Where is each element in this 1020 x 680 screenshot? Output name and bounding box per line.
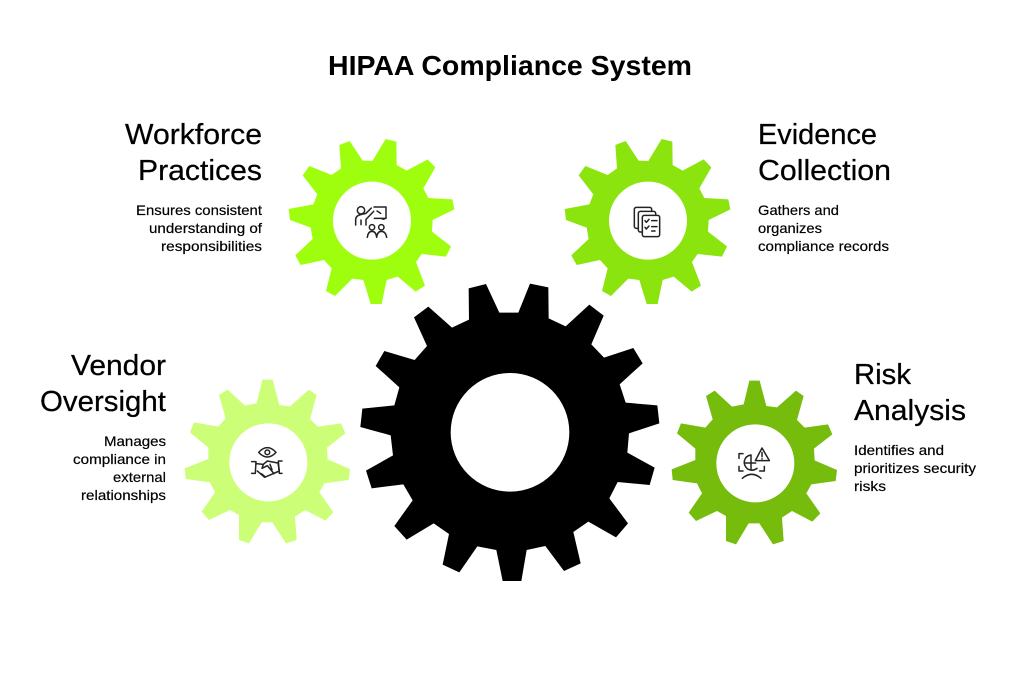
panel: vendor oversight: [40, 350, 350, 543]
title: HIPAA Compliance System: [328, 50, 692, 81]
text: risk description: Identifies and: [854, 442, 944, 458]
gear: workforce practices: [289, 139, 454, 304]
icon: risk warning and chart: [739, 448, 769, 478]
text: workforce description: Ensures consistent: [136, 202, 262, 218]
gear: risk analysis: [672, 381, 837, 544]
text: vendor description: external: [113, 469, 166, 485]
heading: vendor oversight: Vendor: [71, 350, 166, 382]
text: vendor description: Manages: [104, 433, 166, 449]
panel: workforce practices: [125, 119, 454, 304]
heading: workforce practices: Workforce: [125, 119, 262, 151]
heading: evidence collection: [758, 119, 891, 187]
text: evidence description: Gathers and: [758, 202, 839, 218]
text: risk description: prioritizes security: [854, 460, 976, 476]
icon: stacked checklists: [634, 207, 660, 237]
icon: eye over handshake: [252, 448, 282, 477]
panel: evidence collection: [565, 119, 891, 304]
text: evidence description: compliance records: [758, 238, 889, 254]
heading: evidence collection: Collection: [758, 155, 891, 187]
heading: evidence collection: Evidence: [758, 119, 877, 151]
text: risk description: [854, 442, 976, 494]
gear: evidence collection: [565, 139, 730, 304]
text: workforce description: [136, 202, 262, 254]
heading: workforce practices: [125, 119, 262, 187]
text: risk description: risks: [854, 478, 886, 494]
heading: risk analysis: [854, 359, 966, 427]
heading: risk analysis: Risk: [854, 359, 912, 391]
text: workforce description: understanding of: [149, 220, 262, 236]
text: evidence description: [758, 202, 889, 254]
text: workforce description: responsibilities: [161, 238, 262, 254]
heading: vendor oversight: Oversight: [40, 386, 166, 418]
text: vendor description: compliance in: [73, 451, 166, 467]
panel: risk analysis: [672, 359, 976, 544]
icon: trainer and audience: [356, 207, 387, 237]
gear: vendor oversight: [185, 380, 350, 543]
heading: risk analysis: Analysis: [854, 395, 966, 427]
text: vendor description: [73, 433, 166, 503]
heading: workforce practices: Practices: [138, 155, 262, 187]
central black gear: [360, 284, 659, 581]
text: vendor description: relationships: [81, 487, 166, 503]
heading: vendor oversight: [40, 350, 166, 418]
text: evidence description: organizes: [758, 220, 822, 236]
